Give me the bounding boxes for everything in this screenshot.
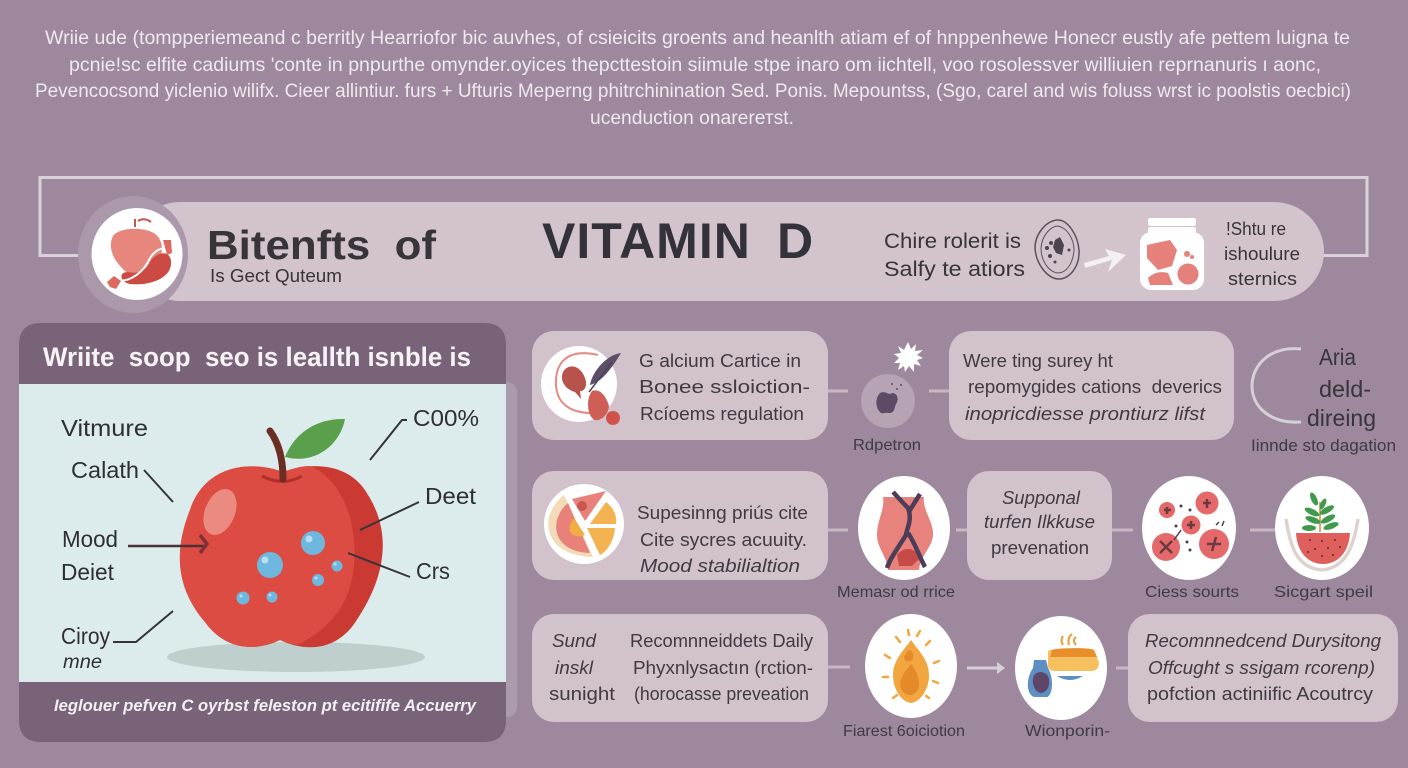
- arrow: [1084, 249, 1126, 272]
- banner text: right: ishoulure: [1224, 244, 1300, 264]
- card text: inopricdiesse prontiurz lifst: [965, 403, 1206, 424]
- card text: [1145, 630, 1382, 704]
- card text: repomygides cations deverics: [968, 376, 1222, 397]
- subheading: Is Gect Quteum: [210, 266, 342, 286]
- intro text block: Wriie ude (tompperiemeand c berritly Hearriofor bic auvhes, of csieicits groents and heanlth atiam ef of hnppenhewe Honecr eustly afe pettem luignа te: [45, 28, 1350, 49]
- card text: right column: Recomnneiddets Daily: [630, 630, 814, 651]
- card text: turfen Ilkkuse: [984, 511, 1095, 532]
- heading: Bitenfts of: Bitenfts of: [207, 222, 436, 268]
- label: cells: Ciess sourts: [1145, 584, 1239, 601]
- icon: receptor circle: [861, 374, 915, 428]
- icon: apple and gut badge: [78, 196, 188, 313]
- callout labels: Calath: [71, 457, 139, 483]
- card: recommended: [1128, 614, 1398, 722]
- icon: joint circle: [858, 476, 950, 580]
- card text: right column: Phyxnlysactın (rction-: [633, 657, 813, 678]
- card text: left column: inskl: [555, 657, 594, 678]
- icon: sun burst: [894, 342, 923, 372]
- icon: bone and feather: [541, 346, 621, 425]
- icon: segmented pie: [544, 484, 624, 564]
- intro text block: ucenduction onarerетst.: [590, 108, 794, 129]
- banner text: left: Chire rolerit is: [884, 230, 1021, 253]
- title banner: [78, 196, 1324, 313]
- arc callout: [1252, 344, 1376, 431]
- panel header background: [19, 323, 506, 384]
- panel footer text: Ieglouer pefven C oyrbst feleston pt ecitifife Accuerry: [54, 697, 477, 715]
- callout labels: Vitmure: [61, 415, 148, 441]
- card: top right: [949, 331, 1234, 440]
- apple shadow: [167, 642, 425, 672]
- banner text: right: [1224, 219, 1300, 289]
- arc callout text: [1307, 344, 1376, 431]
- card: sunlight: [532, 614, 828, 722]
- callout labels: Mood: [62, 526, 118, 552]
- card text: [637, 502, 808, 576]
- icon: watermelon and plant circle: [1275, 476, 1369, 580]
- label: joint: Memasr od rrice: [837, 584, 955, 601]
- card: prevention: [967, 471, 1112, 580]
- banner text: right: !Shtu re: [1226, 219, 1286, 239]
- panel: apple diagram: [19, 323, 517, 742]
- icon: supplement jar: [1140, 218, 1204, 290]
- card text: right column: [630, 630, 814, 704]
- banner text: left: [884, 230, 1025, 281]
- card text: Were ting surey ht: [963, 350, 1113, 371]
- heading: Vitamin D: VITAMIN: [542, 213, 751, 269]
- label: receptor: Rdpetron: [853, 437, 921, 454]
- callout labels: Deet: [425, 483, 477, 509]
- callout labels: Crs: [416, 558, 450, 584]
- card text: Mood stabilialtion: [640, 555, 800, 576]
- icon: apple: [180, 419, 383, 647]
- callout labels: mne: [63, 652, 102, 673]
- card text: left column: sunight: [549, 683, 615, 704]
- card text: left column: Sund: [552, 630, 597, 651]
- card: calcium: [532, 331, 828, 440]
- panel footer background: [19, 682, 506, 742]
- intro text block: Pevencocsond yiclenio wilifx. Cieer allintiur. furs + Ufturis Meperng phitrchinination Sed. Ponis. Mepountss, (Sgo, carel and wis foluss wrst ic poolstis oecbici): [35, 81, 1351, 102]
- card text: Rcíoems regulation: [640, 403, 804, 424]
- card text: prevenation: [991, 537, 1089, 558]
- card text: G alcium Cartice in: [639, 350, 801, 371]
- card text: left column: [549, 630, 615, 704]
- panel heading: Wriite soop seo is leallth isnble is: [43, 342, 471, 372]
- card text: Cite sycres acuuity.: [640, 529, 807, 550]
- label: sun drop: Fiarest 6oiciotion: [843, 723, 965, 740]
- title frame outline: [40, 178, 1367, 256]
- card text: right column: (horocasse prevеation: [634, 683, 809, 704]
- arc callout text: direing: [1307, 405, 1376, 431]
- intro text block: pcnie!sc elfite cadiums 'conte in pnpurthe omynder.oyices thepcttestoin siimule stpe inaro om iichtell, voo rosolessver williuien reprnanuris ı aonc,: [69, 55, 1321, 76]
- card text: [963, 350, 1222, 424]
- label: watermelon: Sicgart speil: [1274, 584, 1373, 601]
- card text: [984, 487, 1095, 558]
- diagram background: [19, 384, 506, 682]
- arrow: [967, 662, 1005, 674]
- callout labels: [61, 405, 479, 673]
- banner text: right: sternics: [1228, 269, 1297, 289]
- intro text block: [35, 28, 1351, 129]
- heading: Vitamin D: D: [777, 213, 814, 269]
- callout labels: Ciroy: [61, 623, 110, 649]
- callout labels: Deiet: [61, 559, 115, 585]
- arc callout text: Aria: [1319, 344, 1356, 370]
- card text: Supesinng priús cite: [637, 502, 808, 523]
- callout lines: [113, 420, 419, 642]
- icon: food circle: [1015, 616, 1107, 720]
- connectors: [828, 391, 1275, 668]
- label: food: Wionporin-: [1025, 723, 1110, 740]
- icon: cells circle: [1142, 476, 1236, 580]
- card text: Supponal: [1002, 487, 1081, 508]
- arc callout text: deld-: [1319, 376, 1371, 402]
- icon: sun vitamin drop: [865, 614, 957, 718]
- card: cognition: [532, 471, 828, 580]
- banner text: left: Salfy te atiors: [884, 258, 1025, 281]
- card text: Bonee ssloiction-: [639, 376, 810, 397]
- card text: Recomnnedcend Durysitong: [1145, 630, 1382, 651]
- callout labels: C00%: [413, 405, 479, 431]
- icon: cell outline: [1035, 220, 1079, 279]
- card text: [639, 350, 810, 424]
- card text: pofction actiniific Acoutrcy: [1147, 683, 1374, 704]
- card text: Offcught s ssigam rcorenp): [1148, 657, 1375, 678]
- label: arc callout: Iinnde sto dagation: [1251, 436, 1396, 455]
